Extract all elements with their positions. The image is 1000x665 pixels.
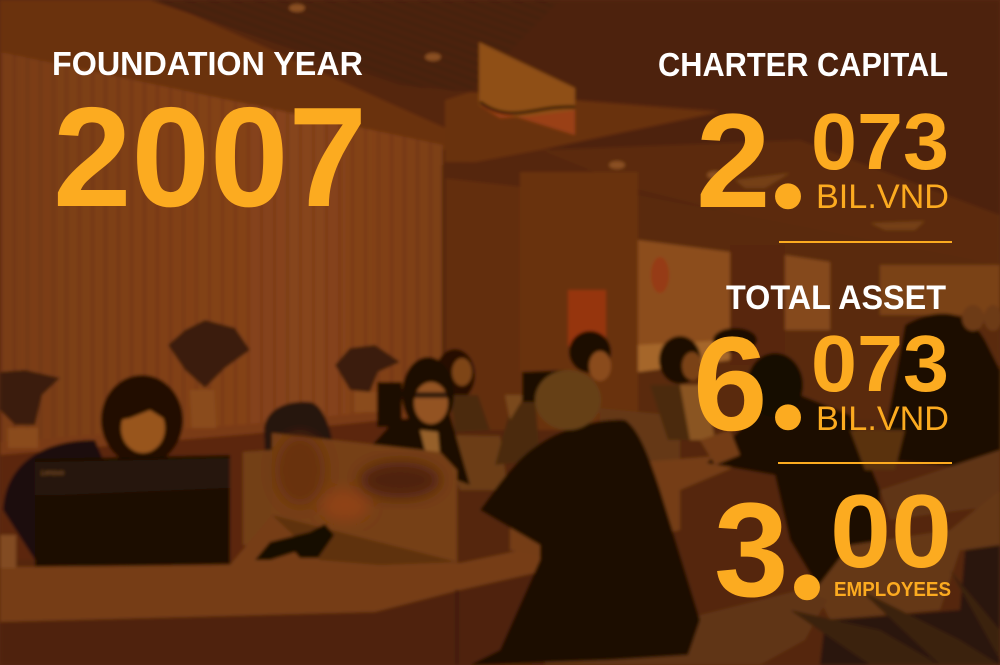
figure: total asset value: . [768,285,808,463]
side paper [0,535,16,568]
lounge chairs [880,450,1000,520]
background man and woman [569,331,611,373]
back wall area [638,195,1000,420]
left wall [0,52,443,445]
figure: total asset value: 073 [811,319,949,408]
partition panel [272,433,457,562]
figure: charter capital value: BIL.VND [816,178,949,216]
slatted ceiling [150,0,560,92]
figure: employees: . [787,455,827,633]
title: charter capital: CHARTER CAPITAL [658,46,948,83]
figure: charter capital value: . [768,64,808,242]
figure: total asset value [693,285,949,463]
receptionist two and chair [377,382,402,427]
second partition and right desk [600,408,680,470]
logo circle [651,257,669,293]
figure: charter capital value [696,64,949,242]
figure: employees: 00 [830,474,952,590]
wainscot [0,410,443,560]
left counter box [243,450,272,545]
figure: employees [714,455,952,633]
man in dark coat [707,395,880,590]
divider [778,462,952,464]
plants [0,320,400,425]
phone [255,524,334,560]
figure: total asset value: 6 [693,310,768,459]
ceiling spots [289,4,925,230]
figure: employees: EMPLOYEES [834,579,951,601]
foreground plant [790,570,1000,665]
right dark person [880,314,1000,470]
lower right ceiling [540,140,1000,265]
column [443,168,638,430]
figure: employees: 3 [714,476,789,625]
hanging sign [479,42,575,135]
desk surface [0,515,548,622]
figure: charter capital value: 073 [811,97,949,186]
desk front [0,570,548,665]
figure: 2007: 2007 [53,78,367,237]
seated client [470,370,700,665]
divider [779,241,952,243]
red poster [568,290,606,346]
figure: total asset value: BIL.VND [816,400,949,438]
chair and receptionist one [264,402,333,452]
monitor [35,455,230,568]
title: total asset: TOTAL ASSET [726,279,946,317]
lit soffit [445,92,720,168]
upper right ceiling [470,0,1000,230]
title: foundation year: FOUNDATION YEAR [52,45,363,82]
background photo: bank transaction office: Lenovo [41,470,64,477]
ceiling soffit above wall [0,0,450,150]
figure: charter capital value: 2 [696,87,771,236]
